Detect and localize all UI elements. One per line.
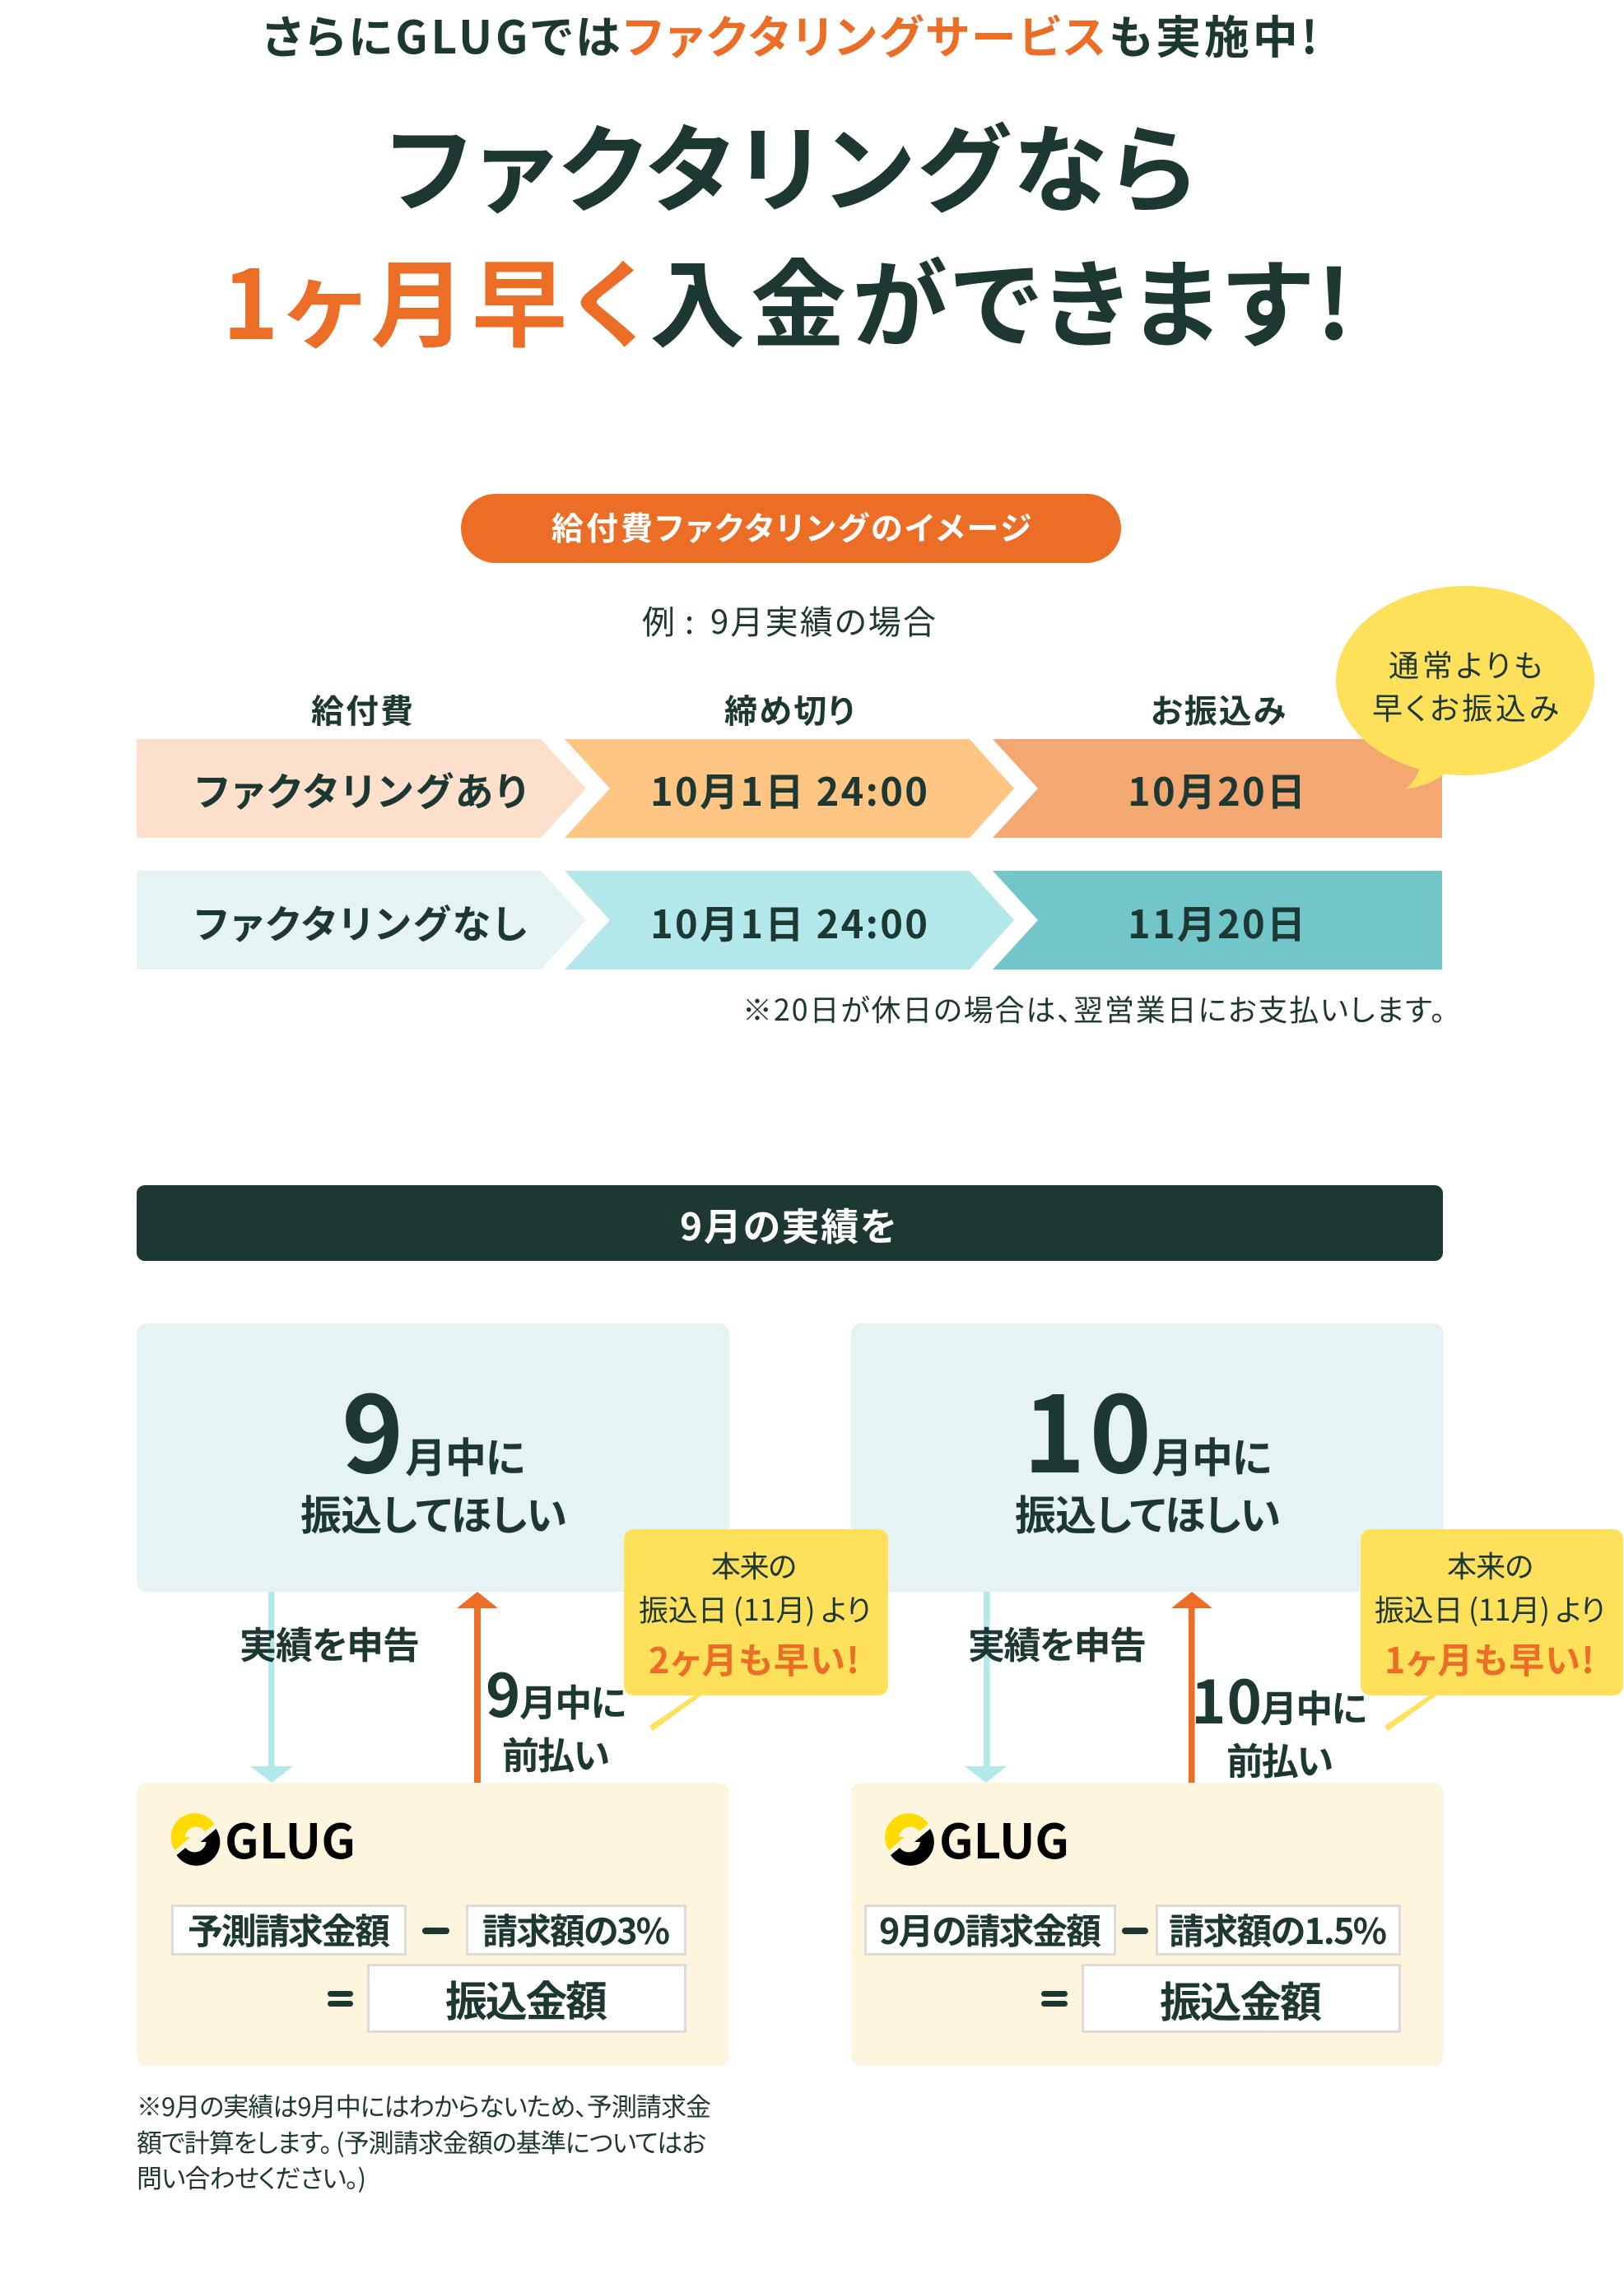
column headers: お振込み bbox=[1151, 685, 1286, 733]
callout bubble: earlier payment: 早くお振込み bbox=[1372, 684, 1559, 728]
row: with factoring: 10月1日 24:00 bbox=[650, 760, 928, 817]
column headers: 給付費 bbox=[311, 685, 413, 733]
label: advance in October bbox=[1191, 1654, 1367, 1785]
lead-in heading: さらにGLUGではファクタリングサービスも実施中! bbox=[263, 1, 1318, 67]
row: with factoring: 10月20日 bbox=[1128, 760, 1305, 817]
callout bubble: earlier payment bbox=[1336, 586, 1594, 789]
label: advance in September: 前払い bbox=[502, 1726, 610, 1779]
logo: GLUG: GLUG bbox=[939, 1803, 1069, 1872]
callout: 2 months earlier bbox=[624, 1529, 888, 1731]
callout bubble: earlier payment: 通常よりも bbox=[1389, 641, 1543, 686]
dark heading bar bbox=[137, 1185, 1443, 1261]
callout: 2 months earlier: 振込日 (11月) より bbox=[639, 1587, 871, 1630]
request box: September bbox=[137, 1323, 729, 1592]
example caption: 9月実績の場合 bbox=[710, 596, 936, 644]
label: report results: 実績を申告 bbox=[968, 1616, 1147, 1669]
main title bbox=[222, 94, 1352, 367]
logo: GLUG: GLUG bbox=[225, 1803, 356, 1872]
formula: 9月の請求金額 bbox=[879, 1904, 1101, 1955]
row: without factoring: ファクタリングなし bbox=[194, 893, 527, 950]
formula: 請求額の1.5% bbox=[1169, 1904, 1387, 1955]
arrow: report results down bbox=[965, 1592, 1007, 1783]
footnote: forecast billing: ※9月の実績は9月中にはわからないため、予測請求金 bbox=[137, 2086, 711, 2123]
callout: 2 months earlier: 2ヶ月も早い! bbox=[649, 1633, 859, 1684]
label: report results: 実績を申告 bbox=[240, 1616, 420, 1669]
row: with factoring bbox=[137, 739, 1442, 838]
label: advance in September: 9 bbox=[486, 1648, 520, 1734]
label: advance in September: 月中に bbox=[519, 1673, 626, 1727]
label: advance in October: 月中に bbox=[1260, 1679, 1367, 1733]
GLUG formula box bbox=[137, 1783, 729, 2066]
example caption: : bbox=[685, 596, 694, 644]
callout: 1 month earlier: 1ヶ月も早い! bbox=[1384, 1633, 1594, 1684]
formula: 予測請求金額 bbox=[188, 1904, 390, 1955]
example caption: 例 bbox=[642, 596, 675, 644]
timeline table bbox=[137, 685, 1442, 970]
row: with factoring: ファクタリングあり bbox=[195, 760, 527, 817]
callout: 2 months earlier: 本来の bbox=[711, 1543, 797, 1586]
GLUG formula box bbox=[851, 1783, 1444, 2066]
row: without factoring bbox=[137, 871, 1442, 970]
formula bbox=[173, 1904, 685, 2031]
holiday note: ※20日が休日の場合は、翌営業日にお支払いします。 bbox=[742, 987, 1445, 1030]
label: advance in October: 前払い bbox=[1226, 1732, 1333, 1785]
request box: September: 月中に bbox=[405, 1426, 525, 1485]
request box: September: 振込してほしい bbox=[300, 1483, 567, 1542]
callout: 1 month earlier: 本来の bbox=[1447, 1543, 1533, 1586]
section pill: factoring image bbox=[461, 494, 1121, 563]
panel: right October flow bbox=[851, 1323, 1623, 2066]
request box: October bbox=[851, 1323, 1444, 1592]
footnote: forecast billing bbox=[137, 2086, 711, 2195]
callout: 1 month earlier: 振込日 (11月) より bbox=[1375, 1587, 1605, 1630]
panel: left September flow bbox=[137, 1323, 888, 2066]
request box: October: 10 bbox=[1023, 1351, 1152, 1503]
formula: 請求額の3% bbox=[482, 1904, 670, 1955]
request box: October: 振込してほしい bbox=[1015, 1483, 1281, 1542]
label: advance in September bbox=[486, 1648, 626, 1779]
footnote: forecast billing: 額で計算をします。 (予測請求金額の基準についてはお bbox=[137, 2123, 706, 2160]
formula: 振込金額 bbox=[1160, 1969, 1322, 2030]
main title: ファクタリングなら bbox=[387, 94, 1195, 232]
request box: September: 9 bbox=[342, 1351, 404, 1503]
arrow: advance payment up bbox=[1171, 1592, 1212, 1783]
formula bbox=[866, 1904, 1399, 2031]
row: without factoring: 11月20日 bbox=[1128, 893, 1305, 950]
arrow: report results down bbox=[250, 1592, 293, 1783]
section pill: factoring image: 給付費ファクタリングのイメージ bbox=[551, 504, 1031, 550]
arrow: advance payment up bbox=[457, 1592, 498, 1783]
formula: 振込金額 bbox=[445, 1968, 607, 2029]
main title: 1ヶ月早く入金ができます! bbox=[222, 229, 1352, 367]
dark heading bar: 9月の実績を bbox=[680, 1198, 896, 1252]
row: without factoring: 10月1日 24:00 bbox=[650, 893, 928, 950]
column headers bbox=[311, 685, 1286, 733]
label: advance in October: 10 bbox=[1191, 1654, 1262, 1741]
callout: 1 month earlier bbox=[1361, 1529, 1623, 1731]
request box: October: 月中に bbox=[1152, 1426, 1272, 1485]
column headers: 締め切り bbox=[724, 685, 854, 733]
footnote: forecast billing: 問い合わせください。) bbox=[137, 2158, 366, 2195]
